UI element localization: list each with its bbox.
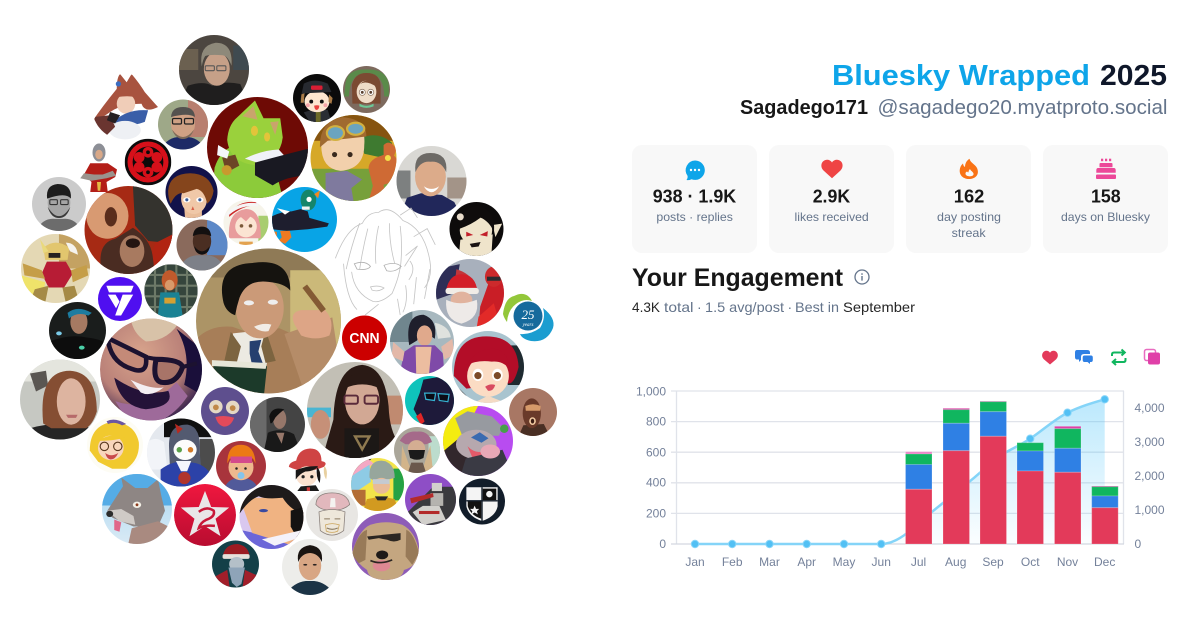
stat card: posts and replies: 938 · 1.9K [653, 186, 736, 206]
left axis labels: 600 [646, 446, 666, 460]
avatar: grey wolf on blue [102, 474, 172, 544]
avatar: knight sprite [80, 144, 117, 192]
stat card: days on Bluesky: 158 [1091, 186, 1121, 206]
avatar: old man in santa hat [212, 540, 259, 588]
cumulative line [695, 399, 1105, 544]
avatar: santa beside red ranger [436, 259, 506, 327]
avatar: anime man in profile [240, 485, 304, 549]
line points [691, 396, 1108, 548]
stat card: posts and replies [632, 145, 757, 253]
stat card: likes received [769, 145, 894, 253]
month labels: May [833, 555, 855, 569]
account name and handle: Sagadego171 [740, 97, 868, 119]
engagement summary line: September [843, 299, 915, 315]
bar: Oct [1017, 443, 1044, 544]
avatar: CNN logo: CNN [349, 331, 380, 347]
avatar: person with black mask [394, 427, 440, 473]
month labels: Mar [759, 555, 780, 569]
icon: heart [821, 160, 843, 178]
avatar: brown-haired girl with glasses [343, 66, 390, 113]
month labels: Jul [911, 555, 926, 569]
avatar: CNN logo [342, 316, 387, 360]
avatar: 25 years logo: 25 [522, 307, 535, 322]
avatar: masked mercenary [509, 388, 557, 436]
chart legend icons [1042, 350, 1160, 365]
engagement summary line: Best in [795, 299, 839, 315]
icon: quotes squares [1144, 350, 1160, 364]
icon: flame [960, 159, 978, 179]
avatar: dark helmet on teal [405, 376, 454, 425]
avatar: woman in purple outfit [390, 310, 454, 374]
stat card: day posting streak: 162 [954, 186, 984, 206]
left axis labels: 200 [646, 506, 666, 520]
icon: info [855, 270, 869, 284]
avatar: brown-haired anime boy [166, 166, 218, 218]
right axis labels: 0 [1134, 537, 1142, 551]
avatar: grey cat girl in blue kimono [147, 418, 215, 486]
avatar: dark-skinned man in hoodie [176, 220, 228, 270]
avatar: robot on purple [405, 474, 456, 525]
avatar: dark-haired person in shadow [250, 397, 305, 452]
month labels [685, 555, 1115, 569]
account name and handle: @sagadego20.myatproto.social [878, 97, 1168, 119]
avatar: girl in red hat sprite [289, 448, 327, 491]
stat card: likes received: 2.9K [813, 186, 850, 206]
avatar: green cat on dark red [207, 97, 313, 198]
month labels: Nov [1057, 555, 1078, 569]
bar: Sep [980, 401, 1006, 544]
icon: likes heart [1042, 351, 1058, 364]
avatar: asian man in dark shirt [282, 539, 338, 595]
avatar: black and white man [32, 177, 86, 231]
avatar: masked officer on pride colours [351, 458, 404, 511]
avatar: large detective with book [196, 248, 341, 394]
avatar: black and white shield on navy [459, 478, 505, 524]
avatar: pencil drawn face [306, 489, 358, 541]
avatar: 25 years logo [503, 294, 554, 341]
left axis labels: 800 [646, 414, 666, 428]
avatar: man with grey hair [179, 35, 249, 105]
engagement summary line: · [788, 299, 792, 315]
avatar: red flower on black [125, 139, 171, 185]
avatar: vampire girl with black hair [450, 202, 504, 256]
stat card: day posting streak: day posting [937, 210, 1001, 224]
bar: Nov [1054, 426, 1081, 544]
month labels: Oct [1021, 555, 1040, 569]
left axis labels: 400 [646, 476, 666, 490]
avatar: pink-haired girl in santa hat [224, 200, 268, 245]
right axis labels: 1,000 [1134, 503, 1165, 517]
avatar: orange-haired baby with headband [216, 441, 266, 491]
month labels: Sep [982, 555, 1004, 569]
engagement summary line: total [664, 299, 694, 315]
month labels: Feb [722, 555, 743, 569]
avatar: woman with long dark hair and glasses [307, 362, 403, 458]
avatar: blonde girl with glasses [87, 417, 143, 473]
month labels: Jan [685, 555, 705, 569]
month labels: Aug [945, 555, 966, 569]
icon: speech bubble [686, 160, 705, 180]
month labels: Jun [872, 555, 891, 569]
engagement summary line: 4.3K [632, 299, 661, 315]
avatar: boy in black cap [293, 74, 341, 122]
engagement summary line: · [697, 299, 702, 315]
account name and handle [740, 97, 1168, 119]
left axis labels [636, 384, 666, 551]
icon: replies bubbles [1075, 350, 1093, 364]
avatar: reddish blurred photo [84, 186, 172, 274]
title: 2025 [1100, 60, 1167, 92]
icon: reposts arrows [1112, 350, 1126, 365]
avatar: 25 years logo: years [522, 323, 533, 328]
engagement summary line [632, 299, 915, 315]
avatar: grey rat on purple and yellow [443, 406, 513, 476]
stat card: days on Bluesky [1043, 145, 1168, 253]
avatar: red-haired anime girl [452, 331, 524, 403]
bar: Jul [906, 452, 932, 544]
avatar: smiling man with dark glasses [100, 318, 202, 426]
bar: Aug [943, 408, 970, 544]
stacked bars [906, 401, 1118, 544]
right axis labels: 2,000 [1134, 469, 1165, 483]
avatar: pixel mosaic figure [144, 264, 198, 318]
stat card: posts and replies: posts · replies [656, 210, 733, 224]
avatar: smiling man in navy fleece [396, 146, 466, 216]
avatar: man with cap and microphone [49, 302, 106, 359]
icon: birthday cake [1096, 159, 1116, 179]
stat card: days on Bluesky: days on Bluesky [1061, 210, 1150, 224]
heading: Your Engagement: Your Engagement [632, 264, 844, 292]
avatar: pixel duck on blue [272, 187, 337, 252]
engagement summary line: 1.5 avg/post [705, 299, 784, 315]
stat card: day posting streak: streak [952, 226, 987, 240]
avatar: purple blob with glasses [201, 387, 249, 435]
avatar: golden dog with eyepatch [352, 513, 419, 580]
stat card: day posting streak [906, 145, 1031, 253]
avatar: pencil sketch of elf girl [330, 207, 438, 315]
right axis labels [1134, 401, 1165, 551]
avatar: goggled boy with orange dinosaur [310, 115, 399, 201]
stat card: likes received: likes received [794, 210, 869, 224]
right axis labels: 3,000 [1134, 435, 1165, 449]
title: Bluesky Wrapped [832, 60, 1090, 92]
left axis labels: 1,000 [636, 384, 666, 398]
month labels: Apr [797, 555, 816, 569]
bar: Dec [1092, 486, 1118, 544]
left axis labels: 0 [659, 537, 666, 551]
avatar: gold and red robot [21, 234, 90, 303]
avatar cluster [20, 35, 557, 595]
avatar: purple V logo [98, 277, 142, 321]
right axis labels: 4,000 [1134, 401, 1165, 415]
avatar: man with glasses and blue shirt [158, 100, 208, 150]
cumulative area [881, 399, 1105, 544]
month labels: Dec [1094, 555, 1115, 569]
chart: monthly engagement stacked bars with cumulative line [636, 384, 1165, 569]
avatar: red star logo [174, 484, 236, 546]
avatar: red-haired cat girl [92, 74, 158, 140]
avatar: woman with long brown hair [20, 360, 100, 440]
